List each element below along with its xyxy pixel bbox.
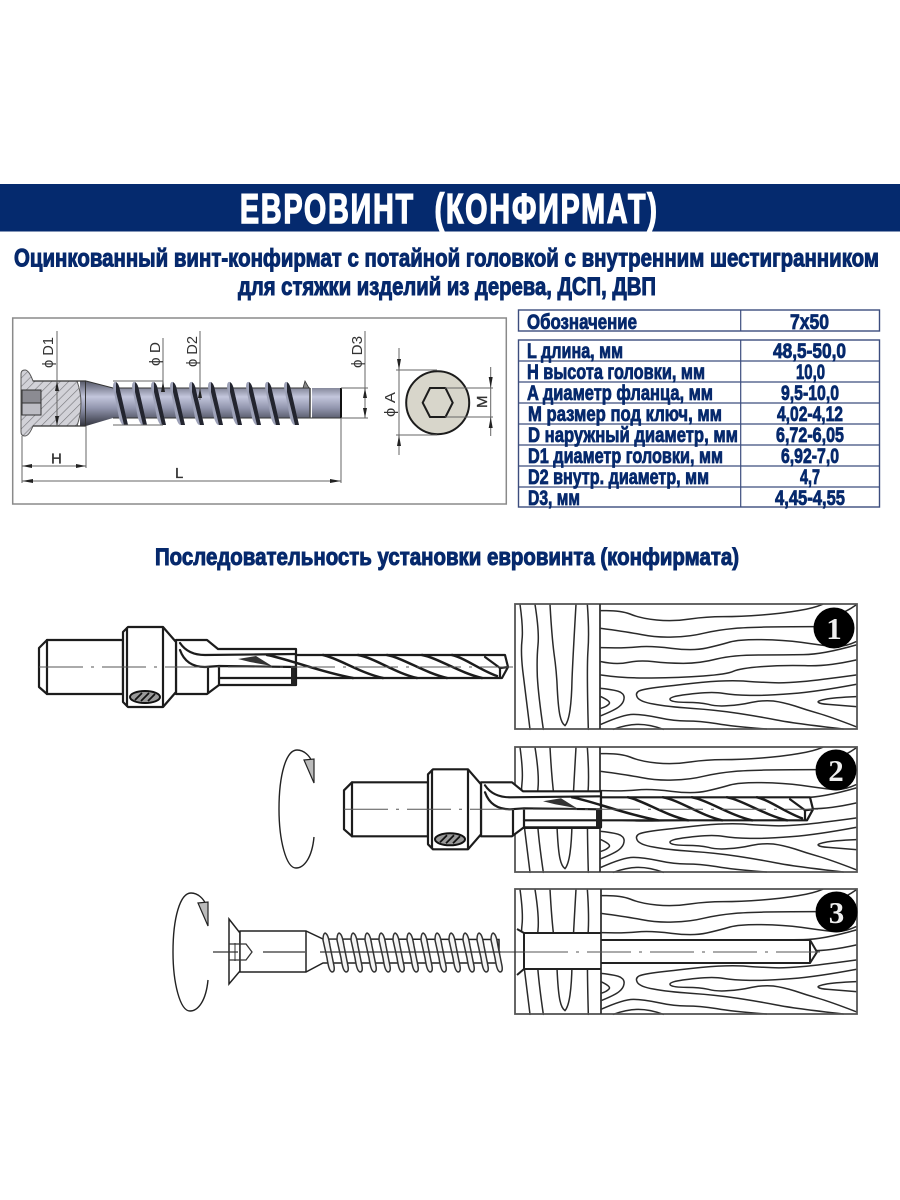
table rows: 48,5-50,0 bbox=[773, 340, 846, 363]
badge 1: 1 bbox=[826, 611, 842, 646]
table rows: 10,0 bbox=[796, 361, 825, 384]
step 1: drill and wood block bbox=[39, 604, 857, 729]
table rows: 4,45-4,55 bbox=[775, 487, 845, 510]
table rows: M размер под ключ, мм bbox=[528, 403, 722, 426]
badge 2: 2 bbox=[828, 753, 844, 788]
table rows bbox=[527, 340, 846, 510]
table header row: 7x50 bbox=[790, 311, 829, 334]
table rows: 9,5-10,0 bbox=[781, 382, 839, 405]
table rows: D наружный диаметр, мм bbox=[528, 424, 738, 447]
subtitle description: для стяжки изделий из дерева, ДСП, ДВП bbox=[238, 273, 656, 301]
screw head end view bbox=[396, 348, 493, 455]
table rows: D1 диаметр головки, мм bbox=[528, 445, 723, 468]
dimension labels: ϕ D3 bbox=[349, 336, 366, 368]
step 3: screw and prepared hole bbox=[173, 889, 858, 1014]
screw side view bbox=[21, 370, 341, 436]
dimension labels: H bbox=[51, 450, 62, 468]
title banner bbox=[0, 184, 900, 232]
badge 3: 3 bbox=[829, 895, 844, 930]
confirmat screw bbox=[213, 919, 502, 984]
dimension lines bbox=[22, 331, 368, 483]
dimension labels: ϕ D1 bbox=[40, 337, 57, 368]
table rows: 4,7 bbox=[800, 466, 820, 489]
table rows: A диаметр фланца, мм bbox=[527, 382, 713, 405]
badge 1 bbox=[814, 608, 854, 648]
dimension labels: ϕ A bbox=[382, 392, 399, 417]
table header row bbox=[527, 311, 829, 334]
installation sequence heading: Последовательность установки евровинта (конфирмата) bbox=[155, 544, 739, 571]
wood block 3 with hole bbox=[501, 889, 857, 1014]
wood block 1 bbox=[515, 604, 857, 729]
table rows: 6,92-7,0 bbox=[781, 445, 839, 468]
dimension labels: ϕ D bbox=[147, 342, 164, 366]
badge 2 bbox=[816, 750, 856, 790]
table rows: 4,02-4,12 bbox=[777, 403, 843, 426]
dimension labels: L bbox=[175, 465, 183, 482]
table rows: D2 внутр. диаметр, мм bbox=[528, 466, 709, 489]
rotation arrow 3 bbox=[173, 893, 208, 1011]
table rows: H высота головки, мм bbox=[527, 361, 705, 384]
title: ЕВРОВИНТ (КОНФИРМАТ) bbox=[240, 184, 657, 232]
step 2: drilling into wood bbox=[279, 747, 857, 872]
subtitle description bbox=[14, 244, 879, 301]
table header row: Обозначение bbox=[527, 311, 637, 334]
table rows: D3, мм bbox=[528, 487, 580, 510]
dimension labels: M bbox=[474, 396, 491, 408]
dimension labels bbox=[40, 336, 491, 482]
table rows: 6,72-6,05 bbox=[776, 424, 844, 447]
table rows: L длина, мм bbox=[527, 340, 623, 363]
drill in hole bbox=[344, 769, 818, 849]
panel: screw dimension drawing bbox=[13, 318, 506, 504]
dimension labels: ϕ D2 bbox=[184, 336, 201, 367]
wood block 2 bbox=[515, 747, 857, 872]
badge 3 bbox=[816, 892, 858, 932]
specification table bbox=[518, 310, 880, 510]
drill with countersink 1 bbox=[39, 627, 513, 707]
rotation arrow 2 bbox=[279, 750, 314, 868]
